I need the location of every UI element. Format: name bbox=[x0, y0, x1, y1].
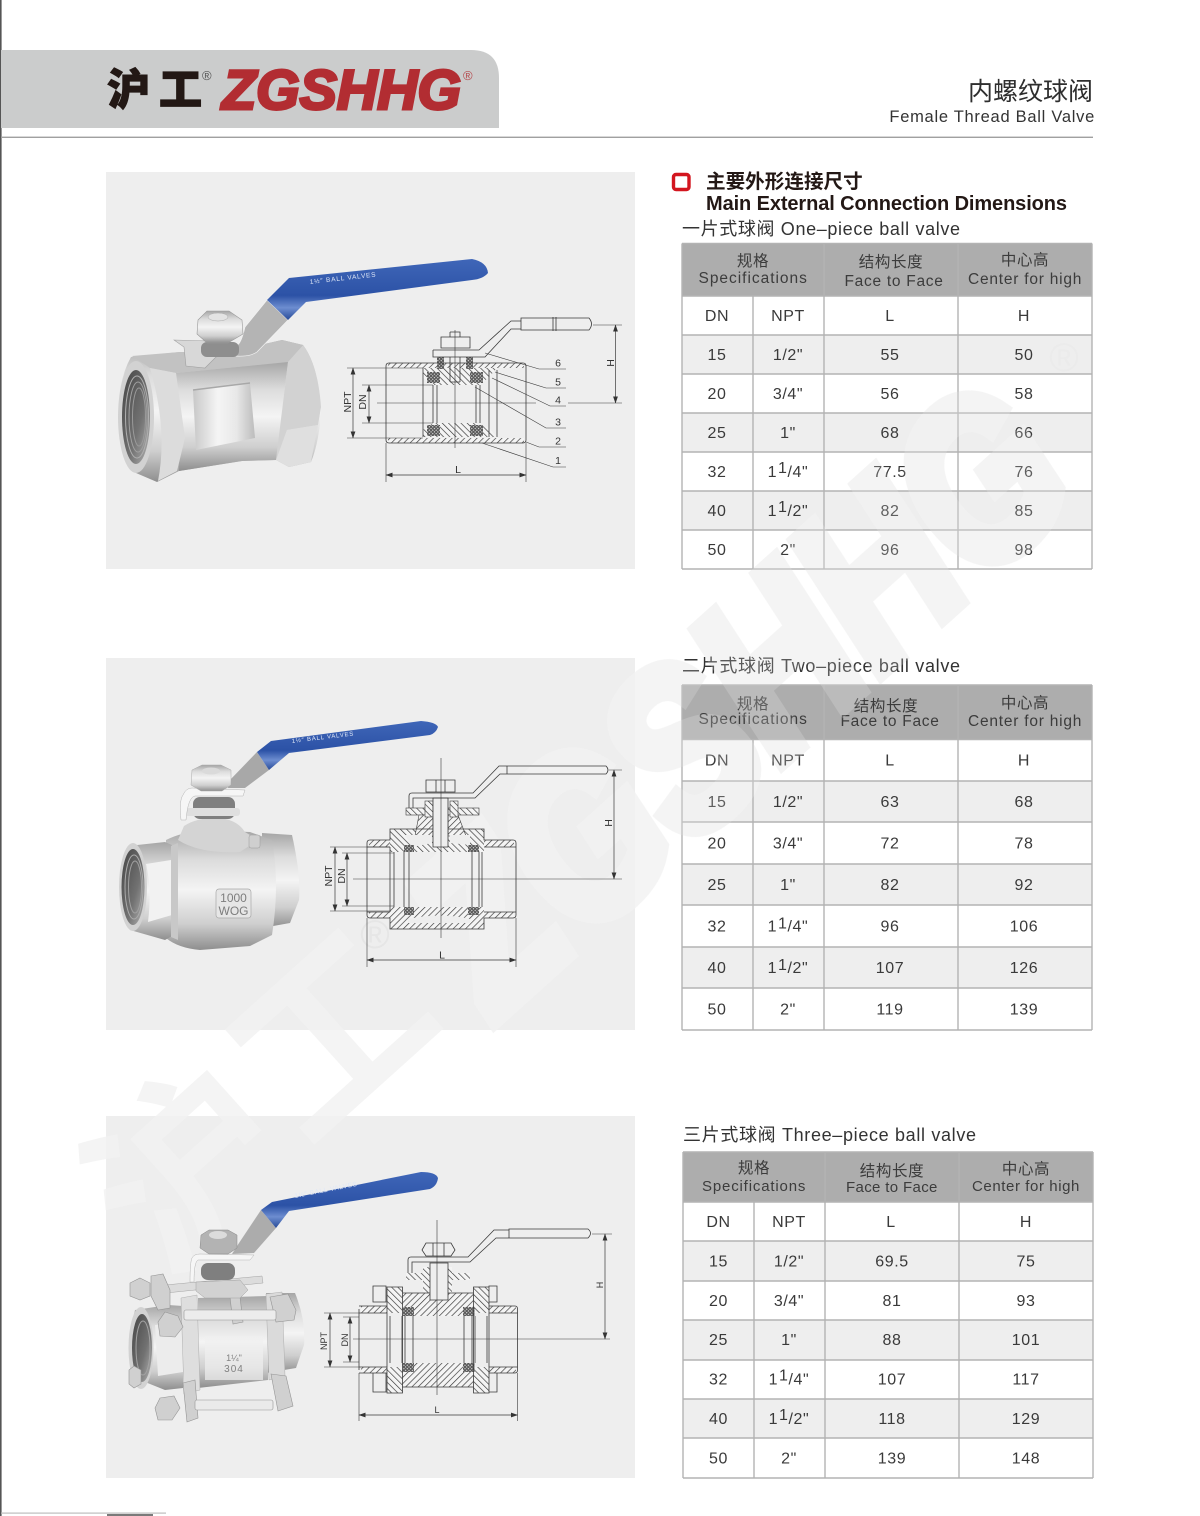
washers bbox=[193, 797, 235, 819]
diagram: three-piece cross-section: L bbox=[434, 1405, 440, 1415]
table: two-piece dimensions: 72 bbox=[880, 836, 900, 852]
table: three-piece dimensions: 40 bbox=[709, 1411, 728, 1428]
table: two-piece dimensions: 78 bbox=[1014, 836, 1034, 852]
table: two-piece dimensions: NPT bbox=[771, 752, 805, 770]
table: two-piece dimensions: 25 bbox=[708, 877, 726, 894]
table: three-piece dimensions: 1 bbox=[769, 1372, 777, 1388]
diagram: one-piece cross-section: 1 bbox=[555, 455, 561, 467]
diagram: three-piece cross-section bbox=[319, 1220, 612, 1421]
diagram: one-piece cross-section: L bbox=[455, 464, 461, 476]
dimension arrows bbox=[334, 847, 336, 911]
diagram: one-piece cross-section bbox=[342, 317, 622, 482]
stop tab and base bbox=[174, 340, 226, 368]
table: three-piece dimensions: NPT bbox=[772, 1214, 806, 1231]
table: two-piece dimensions: /2" bbox=[787, 960, 808, 977]
table: two-piece dimensions: 50 bbox=[708, 1002, 726, 1018]
table: one-piece dimensions: 25 bbox=[708, 425, 726, 442]
table: three-piece dimensions: 1 bbox=[769, 1411, 777, 1428]
table: one-piece dimensions: 1 bbox=[778, 460, 787, 477]
face bbox=[119, 843, 147, 931]
left hex facet bbox=[150, 368, 185, 481]
table: one-piece dimensions: 1 bbox=[778, 499, 787, 516]
table: two-piece dimensions: 96 bbox=[880, 918, 900, 936]
diagram: one-piece cross-section: 2 bbox=[555, 436, 561, 448]
end section bbox=[129, 1305, 183, 1390]
WOG plate: WOG bbox=[218, 904, 248, 918]
table: two-piece dimensions: Center for high bbox=[968, 713, 1082, 730]
handle blue sleeve bbox=[267, 259, 488, 320]
hex facet bbox=[146, 860, 172, 922]
diagram: one-piece cross-section: 6 bbox=[555, 358, 561, 370]
label: two-piece ball valve: 二片式球阀 Two–piece ball valve bbox=[682, 656, 960, 676]
table: two-piece dimensions: Specifications bbox=[698, 711, 808, 728]
table: two-piece dimensions: 119 bbox=[876, 1002, 904, 1018]
table: two-piece dimensions: 106 bbox=[1010, 918, 1038, 936]
table: one-piece dimensions: 40 bbox=[708, 503, 726, 520]
table: three-piece dimensions: 69.5 bbox=[875, 1254, 909, 1270]
handle and nut bbox=[408, 1229, 590, 1273]
table: three-piece dimensions: 3/4" bbox=[774, 1293, 804, 1310]
size marking: 1¼" bbox=[226, 1353, 242, 1363]
table: one-piece dimensions: 2" bbox=[780, 542, 796, 559]
table: two-piece dimensions: 92 bbox=[1014, 877, 1034, 894]
table: three-piece dimensions: 中心高 bbox=[1002, 1160, 1050, 1178]
table: one-piece dimensions: NPT bbox=[771, 308, 805, 325]
logo: registered mark black: ® bbox=[202, 68, 212, 83]
table: two-piece dimensions: /4" bbox=[787, 918, 808, 936]
page title Chinese: 内螺纹球阀 bbox=[968, 78, 1093, 106]
dimension arrows bbox=[352, 368, 354, 438]
table: three-piece dimensions: 81 bbox=[882, 1293, 902, 1310]
table: two-piece dimensions: 82 bbox=[880, 877, 900, 894]
table: two-piece dimensions: 15 bbox=[708, 794, 726, 811]
two-piece table row shading bbox=[682, 781, 1092, 988]
body silhouette bbox=[118, 340, 321, 482]
table: three-piece dimensions: 50 bbox=[709, 1450, 728, 1468]
table: one-piece dimensions: 66 bbox=[1014, 425, 1034, 442]
table: three-piece dimensions: Face to Face bbox=[846, 1179, 938, 1196]
table: three-piece dimensions: 1/2" bbox=[774, 1254, 804, 1270]
handle steel arm bbox=[232, 1210, 276, 1254]
heading English: Main External Connection Dimensions bbox=[706, 193, 1067, 215]
table: two-piece dimensions: L bbox=[885, 752, 895, 770]
handle blue sleeve bbox=[261, 1172, 438, 1228]
table: one-piece dimensions: 85 bbox=[1014, 503, 1034, 520]
table: three-piece dimensions: DN bbox=[706, 1214, 731, 1231]
centre cylinder bbox=[176, 362, 288, 471]
logo: registered mark red: ® bbox=[463, 68, 473, 83]
label: three-piece ball valve: 三片式球阀 Three–piece ball valve bbox=[683, 1125, 976, 1145]
table: three-piece dimensions bbox=[683, 1152, 1093, 1478]
table: one-piece dimensions: 规格 bbox=[737, 252, 769, 270]
table: one-piece dimensions: 15 bbox=[708, 347, 726, 364]
handle and nut bbox=[409, 766, 608, 808]
table: three-piece dimensions: 规格 bbox=[738, 1159, 770, 1177]
top facet bbox=[132, 340, 303, 373]
table: one-piece dimensions: 50 bbox=[1014, 347, 1034, 364]
table: three-piece dimensions: 148 bbox=[1012, 1450, 1040, 1468]
label: one-piece ball valve: 一片式球阀 One–piece ball valve bbox=[682, 219, 960, 239]
table: three-piece dimensions: 117 bbox=[1012, 1372, 1040, 1388]
diagram: one-piece cross-section: 4 bbox=[555, 394, 561, 406]
bracket bbox=[180, 788, 245, 820]
diagram: two-piece cross-section: L bbox=[439, 950, 445, 962]
neck and stop bbox=[178, 818, 258, 852]
page title English: Female Thread Ball Valve bbox=[889, 108, 1095, 126]
table: three-piece dimensions: L bbox=[886, 1214, 896, 1231]
table: three-piece dimensions: 101 bbox=[1012, 1332, 1040, 1349]
diagram: three-piece cross-section: DN bbox=[340, 1334, 350, 1346]
three-piece table row shading bbox=[683, 1241, 1093, 1438]
table: two-piece dimensions bbox=[682, 685, 1092, 1030]
table: three-piece dimensions: 2" bbox=[781, 1450, 797, 1468]
WOG plate: 1000 bbox=[220, 891, 247, 905]
table: two-piece dimensions: 139 bbox=[1010, 1002, 1038, 1018]
table: one-piece dimensions: H bbox=[1018, 308, 1030, 325]
table: three-piece dimensions: Center for high bbox=[972, 1178, 1080, 1195]
diagram: one-piece cross-section: DN bbox=[357, 394, 369, 410]
size marking: 304 bbox=[224, 1364, 244, 1375]
table: three-piece dimensions: 1 bbox=[779, 1407, 788, 1424]
table: three-piece dimensions: 结构长度 bbox=[860, 1162, 924, 1180]
table: one-piece dimensions: 20 bbox=[708, 386, 726, 403]
table: one-piece dimensions: 82 bbox=[880, 503, 900, 520]
table: three-piece dimensions: 32 bbox=[709, 1372, 728, 1388]
table: one-piece dimensions: Specifications bbox=[698, 270, 808, 287]
table: one-piece dimensions: 结构长度 bbox=[859, 253, 923, 271]
table: three-piece dimensions: 118 bbox=[878, 1411, 906, 1428]
heading Chinese: 主要外形连接尺寸 bbox=[706, 171, 863, 193]
table: two-piece dimensions: 结构长度 bbox=[854, 697, 918, 715]
table: one-piece dimensions: L bbox=[885, 308, 895, 325]
table: one-piece dimensions: 96 bbox=[880, 542, 900, 559]
watermark: brand name diagonal: 沪 bbox=[49, 1028, 332, 1313]
table: two-piece dimensions: 2" bbox=[780, 1002, 796, 1018]
table: two-piece dimensions: 107 bbox=[876, 960, 904, 977]
diagram: three-piece cross-section: H bbox=[595, 1282, 605, 1288]
table: one-piece dimensions: 1 bbox=[768, 464, 776, 481]
handle lettering: 1½″ BALL VALVES bbox=[291, 730, 354, 745]
right hex bbox=[276, 345, 321, 460]
icon: red square bullet bbox=[674, 174, 689, 190]
table: two-piece dimensions: 1/2" bbox=[773, 794, 803, 811]
table: one-piece dimensions: Face to Face bbox=[844, 273, 944, 290]
table: two-piece dimensions: 1 bbox=[778, 916, 787, 932]
table: two-piece dimensions: 1" bbox=[780, 877, 796, 894]
one-piece table row shading bbox=[682, 335, 1092, 530]
table: two-piece dimensions: 1 bbox=[768, 918, 776, 936]
table: one-piece dimensions: 1" bbox=[780, 425, 796, 442]
watermark: brand name diagonal: ® bbox=[360, 913, 390, 957]
table: two-piece dimensions: 40 bbox=[708, 960, 726, 977]
table: two-piece dimensions: 68 bbox=[1014, 794, 1034, 811]
table: two-piece dimensions: DN bbox=[705, 752, 729, 770]
header band with logo bbox=[1, 50, 499, 128]
handle and nut bbox=[433, 317, 592, 382]
diagram: two-piece cross-section bbox=[323, 758, 622, 967]
face bbox=[128, 1307, 154, 1389]
table: one-piece dimensions: DN bbox=[705, 308, 729, 325]
table: one-piece dimensions: 50 bbox=[708, 542, 726, 559]
table: one-piece dimensions: 55 bbox=[880, 347, 900, 364]
table: three-piece dimensions: 75 bbox=[1016, 1254, 1036, 1270]
valve photo: one-piece bbox=[118, 259, 488, 482]
left face bbox=[118, 361, 154, 473]
panel: two-piece valve background bbox=[106, 658, 635, 1030]
table: two-piece dimensions: 1 bbox=[768, 960, 776, 977]
table: one-piece dimensions: 58 bbox=[1014, 386, 1034, 403]
table: three-piece dimensions: 93 bbox=[1016, 1293, 1036, 1310]
table: three-piece dimensions: 139 bbox=[878, 1450, 906, 1468]
header rule bbox=[1, 137, 1093, 138]
part number leaders bbox=[475, 353, 566, 467]
flanges bbox=[181, 1295, 200, 1394]
size marking bbox=[205, 1336, 263, 1380]
tail section bbox=[262, 833, 299, 928]
bracket bbox=[190, 1254, 254, 1282]
diagram: three-piece cross-section: NPT bbox=[319, 1331, 329, 1350]
logo: ZGSHHG: ZGSHHG bbox=[220, 58, 461, 121]
table: two-piece dimensions: H bbox=[1018, 752, 1030, 770]
diagram: one-piece cross-section: NPT bbox=[342, 391, 354, 412]
back rod and lug bbox=[165, 1276, 263, 1293]
table: three-piece dimensions: 25 bbox=[709, 1332, 728, 1349]
table: one-piece dimensions: /2" bbox=[787, 503, 808, 520]
table: one-piece dimensions: 68 bbox=[880, 425, 900, 442]
table: two-piece dimensions: 63 bbox=[880, 794, 900, 811]
diagram: one-piece cross-section: H bbox=[605, 359, 617, 367]
table: two-piece dimensions: 20 bbox=[708, 836, 726, 852]
table: one-piece dimensions: 中心高 bbox=[1001, 251, 1049, 269]
table: three-piece dimensions: Specifications bbox=[702, 1178, 806, 1195]
table: two-piece dimensions: Face to Face bbox=[840, 713, 940, 730]
diagram: one-piece cross-section: 5 bbox=[555, 376, 561, 388]
table: three-piece dimensions: H bbox=[1020, 1214, 1032, 1231]
watermark: brand name diagonal bbox=[49, 336, 1116, 1313]
table: three-piece dimensions: 15 bbox=[709, 1254, 728, 1270]
table: one-piece dimensions: Center for high bbox=[968, 271, 1082, 288]
dimension arrows bbox=[329, 1313, 331, 1367]
table: three-piece dimensions: 1" bbox=[781, 1332, 797, 1349]
diagram: two-piece cross-section: NPT bbox=[323, 865, 335, 886]
table: three-piece dimensions: 129 bbox=[1012, 1411, 1040, 1428]
panel: three-piece valve background bbox=[106, 1116, 635, 1478]
table: one-piece dimensions: 56 bbox=[880, 386, 900, 403]
valve photo: three-piece bbox=[128, 1172, 438, 1422]
table: three-piece dimensions: 107 bbox=[878, 1372, 906, 1388]
table: one-piece dimensions: 76 bbox=[1014, 464, 1034, 481]
hex facet bbox=[155, 1322, 183, 1376]
table: two-piece dimensions: 126 bbox=[1010, 960, 1038, 977]
table: one-piece dimensions: 77.5 bbox=[873, 464, 907, 481]
table: two-piece dimensions: 中心高 bbox=[1001, 694, 1049, 712]
table: two-piece dimensions: 32 bbox=[708, 918, 726, 936]
diagram: two-piece cross-section: H bbox=[603, 819, 615, 827]
collar bbox=[171, 843, 178, 940]
table: one-piece dimensions: 1 bbox=[768, 503, 776, 520]
diagram: one-piece cross-section: 3 bbox=[555, 416, 561, 428]
table: three-piece dimensions: /4" bbox=[788, 1372, 809, 1388]
table: three-piece dimensions: 1 bbox=[779, 1368, 788, 1384]
table: one-piece dimensions: 32 bbox=[708, 464, 726, 481]
watermark: brand name diagonal: ® bbox=[1049, 336, 1079, 380]
watermark: brand name diagonal: 工 bbox=[191, 893, 474, 1178]
table: three-piece dimensions: /2" bbox=[788, 1411, 809, 1428]
diagram: two-piece cross-section: DN bbox=[336, 868, 348, 884]
centre body bbox=[198, 1296, 268, 1388]
table: two-piece dimensions: 规格 bbox=[737, 695, 769, 713]
valve photo: two-piece bbox=[119, 721, 438, 950]
table: three-piece dimensions: 20 bbox=[709, 1293, 728, 1310]
table: two-piece dimensions: 1 bbox=[778, 957, 787, 974]
handle blue sleeve bbox=[257, 721, 438, 770]
table: three-piece dimensions: 88 bbox=[882, 1332, 902, 1349]
handle lettering: 1½″ BALL VALVES bbox=[309, 270, 377, 286]
panel: one-piece valve background bbox=[106, 172, 635, 569]
centre body bbox=[166, 830, 276, 950]
table: one-piece dimensions: 98 bbox=[1014, 542, 1034, 559]
page left edge line bbox=[0, 0, 2, 1516]
hex nut bbox=[191, 765, 231, 791]
hex nut bbox=[197, 311, 243, 343]
footer rule bbox=[1, 1512, 166, 1516]
handle steel arm bbox=[205, 300, 288, 356]
hex nut bbox=[200, 1230, 237, 1254]
end section bbox=[120, 842, 172, 940]
washers bbox=[201, 342, 239, 357]
table: two-piece dimensions: 3/4" bbox=[773, 836, 803, 852]
table: one-piece dimensions: 3/4" bbox=[773, 386, 803, 403]
flat centre plate bbox=[193, 383, 255, 450]
WOG plate bbox=[216, 889, 251, 918]
table: one-piece dimensions bbox=[682, 244, 1092, 569]
handle lettering: 1½″ BALL VALVES bbox=[294, 1180, 358, 1200]
bolts and lugs bbox=[129, 1274, 296, 1422]
handle steel arm bbox=[228, 752, 269, 788]
table: one-piece dimensions: /4" bbox=[787, 464, 808, 481]
base and washers bbox=[196, 1280, 248, 1298]
table: one-piece dimensions: 1/2" bbox=[773, 347, 803, 364]
logo: Chinese brand name: 沪工 bbox=[107, 67, 202, 115]
tail section bbox=[266, 1293, 304, 1373]
